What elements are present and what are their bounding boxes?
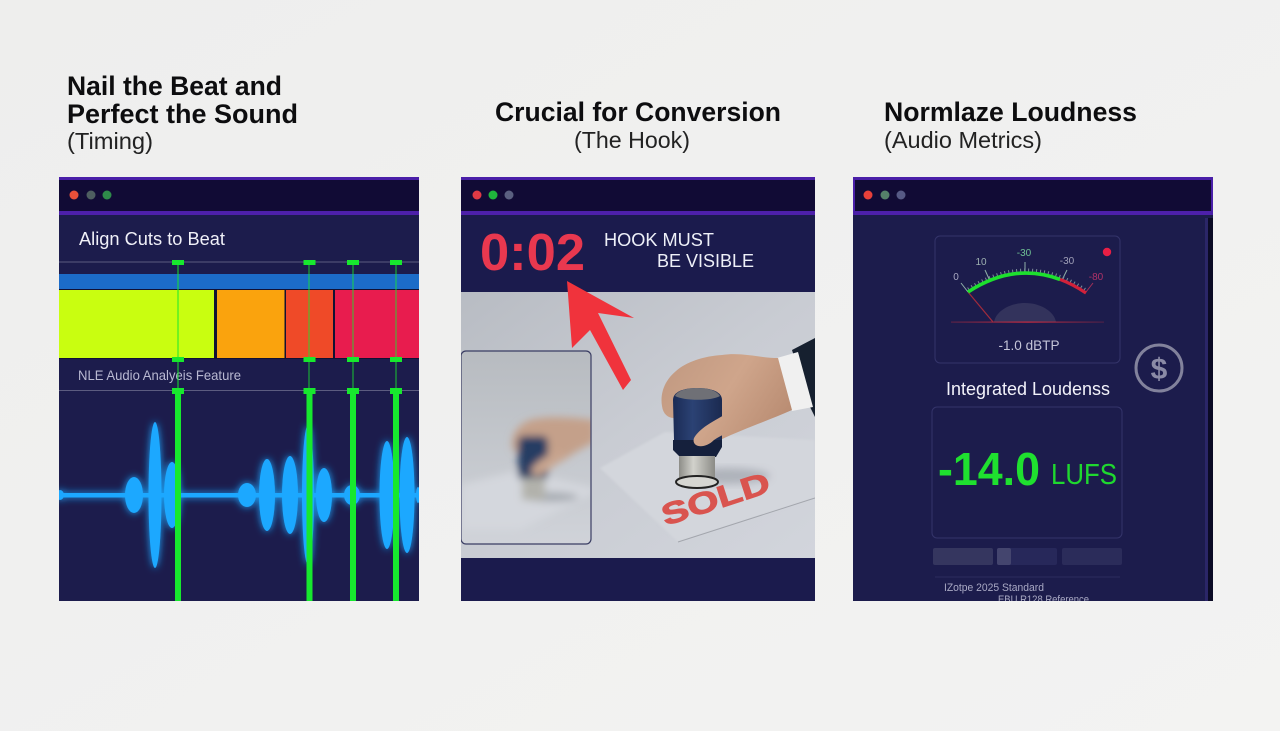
sleeve and cuff <box>777 338 815 417</box>
heading: Crucial for Conversion <box>495 97 781 153</box>
beat markers <box>172 260 402 601</box>
label: hook must be visible: HOOK MUST <box>604 229 714 250</box>
hand <box>662 354 792 440</box>
panel: timing editor window <box>56 177 420 601</box>
label: Align Cuts to Beat: Align Cuts to Beat <box>79 229 225 249</box>
label: NLE Audio Analysis Feature: NLE Audio Analyeis Feature <box>78 367 241 383</box>
thumb <box>694 416 722 446</box>
label: hook must be visible <box>605 233 754 267</box>
SOLD stamp mark: SOLD <box>657 467 774 533</box>
stamp <box>673 388 722 488</box>
reference note: EBU R128 Reference <box>998 594 1089 606</box>
heading: Normlaze Loudness: Normlaze Loudness <box>884 97 1137 127</box>
heading: Normlaze Loudness: (Audio Metrics) <box>884 127 1042 153</box>
photo: stamping SOLD <box>461 292 815 558</box>
label: Integrated Loudness: Integrated Loudenss <box>946 379 1110 399</box>
panel: loudness window <box>853 177 1213 606</box>
title bar <box>59 177 419 215</box>
heading: Nail the Beat <box>67 71 298 154</box>
reference note: IZotpe 2025 Standard <box>944 582 1044 594</box>
gauge: true peak meter: -1.0 dBTP <box>998 337 1060 353</box>
gauge: true peak meter: 0 <box>953 272 959 283</box>
heading: Normlaze Loudness <box>884 97 1137 153</box>
heading: Crucial for Conversion: (The Hook) <box>574 127 690 153</box>
heading: Nail the Beat: Perfect the Sound <box>67 99 298 129</box>
icon: dollar coin: $ <box>1151 353 1168 386</box>
blurred inset frame <box>461 351 600 544</box>
timecode: 0:02 <box>480 224 585 282</box>
readout: LUFS <box>932 407 1122 538</box>
audio waveform <box>56 422 420 568</box>
gauge: true peak meter <box>935 236 1120 363</box>
readout: LUFS: -14.0 <box>938 443 1040 495</box>
gauge: true peak meter: 10 <box>975 257 987 268</box>
title bar <box>461 177 815 215</box>
level bars <box>933 548 1122 565</box>
title bar <box>853 177 1213 215</box>
reference note <box>944 583 1089 601</box>
gauge: true peak meter: -30 <box>1060 256 1075 267</box>
gauge: true peak meter: -80 <box>1089 272 1104 283</box>
heading: Nail the Beat: Nail the Beat and <box>67 71 282 101</box>
timeline clips <box>59 274 419 359</box>
gauge: true peak meter: -30 <box>1017 248 1032 259</box>
arrow pointing to timecode <box>567 281 634 390</box>
heading: Crucial for Conversion: Crucial for Conversion <box>495 97 781 127</box>
label: hook must be visible: BE VISIBLE <box>657 250 754 271</box>
icon: dollar coin <box>1136 345 1182 391</box>
readout: LUFS: LUFS <box>1051 459 1117 491</box>
heading: Nail the Beat: (Timing) <box>67 128 153 154</box>
panel: hook window <box>461 177 815 601</box>
